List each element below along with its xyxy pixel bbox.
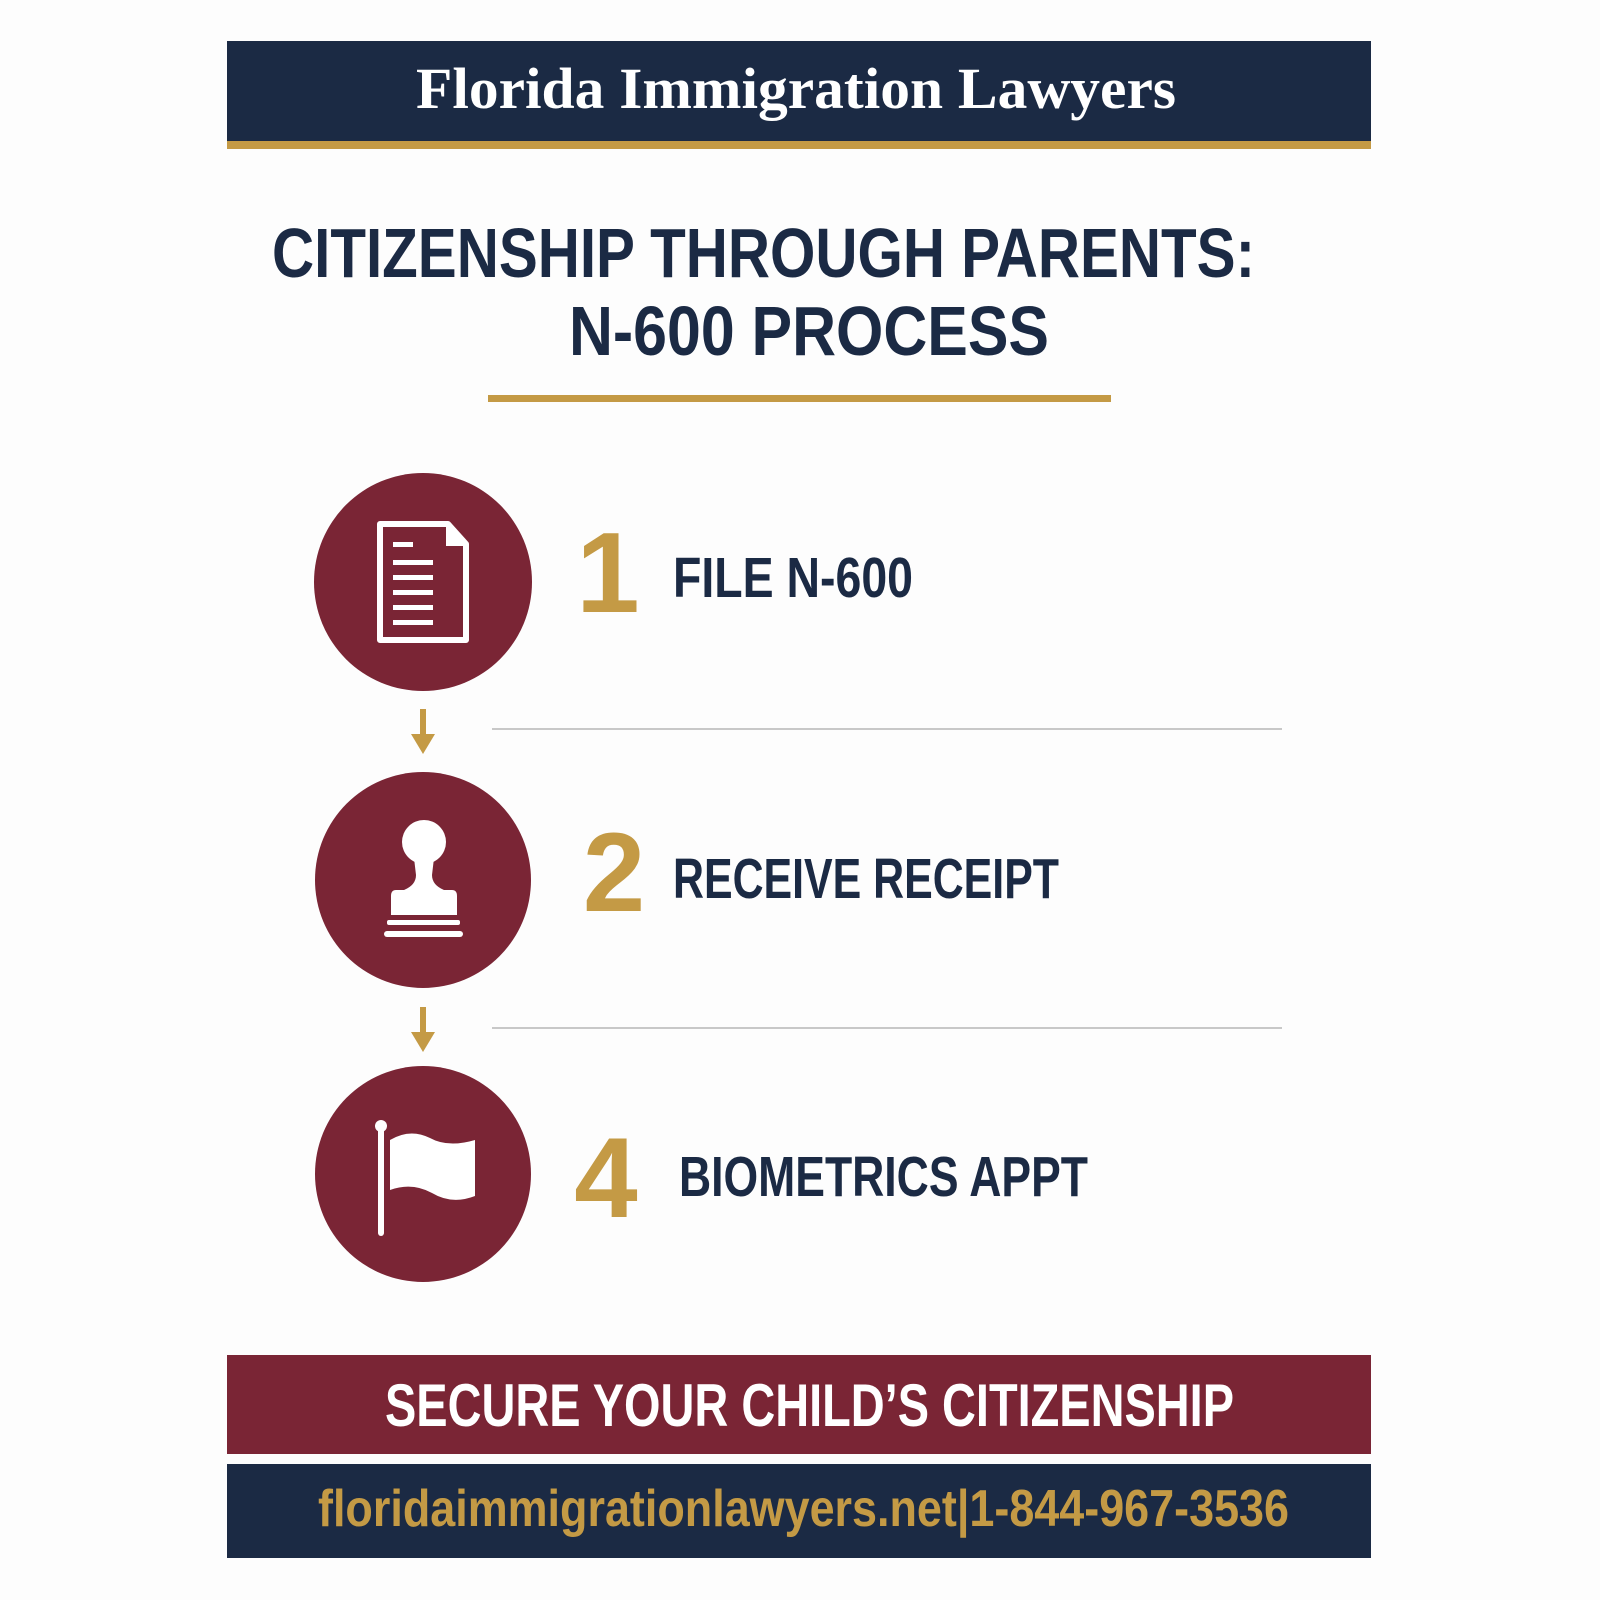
banner: secure citizenship: SECURE YOUR CHILD’S CITIZENSHIP (385, 1372, 1234, 1439)
title underline (488, 395, 1111, 402)
label: file n-600: FILE N-600 (673, 546, 913, 610)
icon: flag (315, 1066, 531, 1282)
number 2: 2 (583, 810, 645, 935)
number 4: 4 (574, 1115, 638, 1242)
number 1: 1 (576, 510, 640, 637)
header text: Florida Immigration Lawyers (416, 56, 1176, 121)
step 4 (315, 1066, 1088, 1282)
step 1 (314, 473, 913, 691)
title: CITIZENSHIP THROUGH PARENTS: (272, 214, 1255, 292)
label: receive receipt: RECEIVE RECEIPT (673, 847, 1059, 911)
step 2 (315, 772, 1059, 988)
label: biometrics appt: BIOMETRICS APPT (679, 1145, 1088, 1209)
title (272, 214, 1255, 370)
arrow 1 (411, 709, 435, 754)
icon: stamp (315, 772, 531, 988)
footer contact bar (227, 1464, 1371, 1558)
arrow 2 (411, 1007, 435, 1052)
footer contact bar: floridaimmigrationlawyers.net|1-844-967-3536 (318, 1480, 1289, 1538)
icon: document (314, 473, 532, 691)
banner: secure citizenship (227, 1355, 1371, 1454)
title: N-600 PROCESS (569, 292, 1049, 370)
header bar (227, 41, 1371, 149)
